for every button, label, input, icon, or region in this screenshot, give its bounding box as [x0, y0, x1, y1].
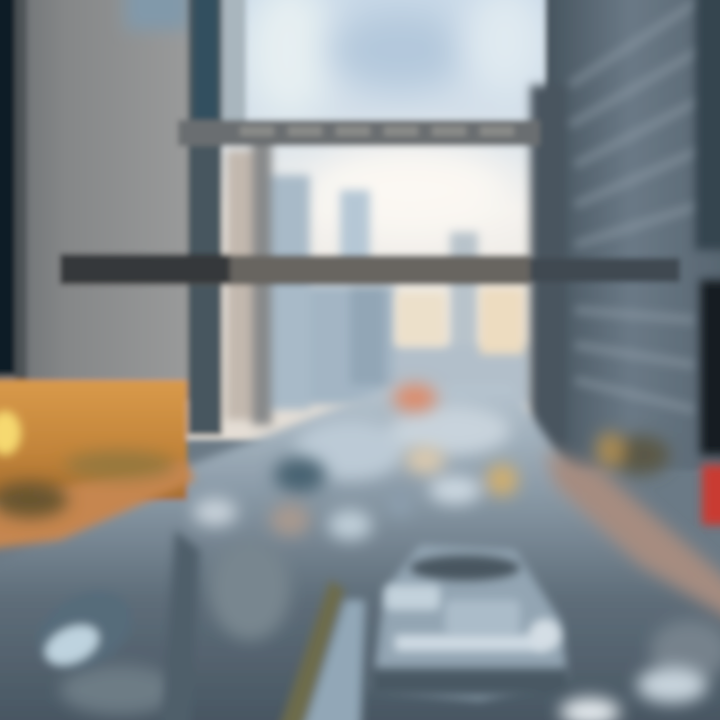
right building: [530, 0, 720, 470]
dark column: [188, 0, 246, 435]
red sign: [702, 465, 720, 525]
sky: [0, 0, 720, 440]
bottom right cars: [560, 667, 707, 720]
road: [0, 385, 720, 720]
left car: [24, 575, 146, 685]
warm lit windows: [396, 288, 524, 354]
orange storefront: [0, 380, 195, 550]
distant towers: [226, 135, 530, 425]
upper sky bridge: [178, 120, 540, 146]
lower sky bridge: [60, 254, 680, 285]
left building: [0, 0, 192, 400]
distant traffic lights and cars: [193, 384, 518, 540]
road lane marking: [160, 530, 365, 720]
main car: [370, 545, 570, 700]
road blotches: [60, 405, 720, 715]
sidewalk right: [545, 432, 720, 625]
